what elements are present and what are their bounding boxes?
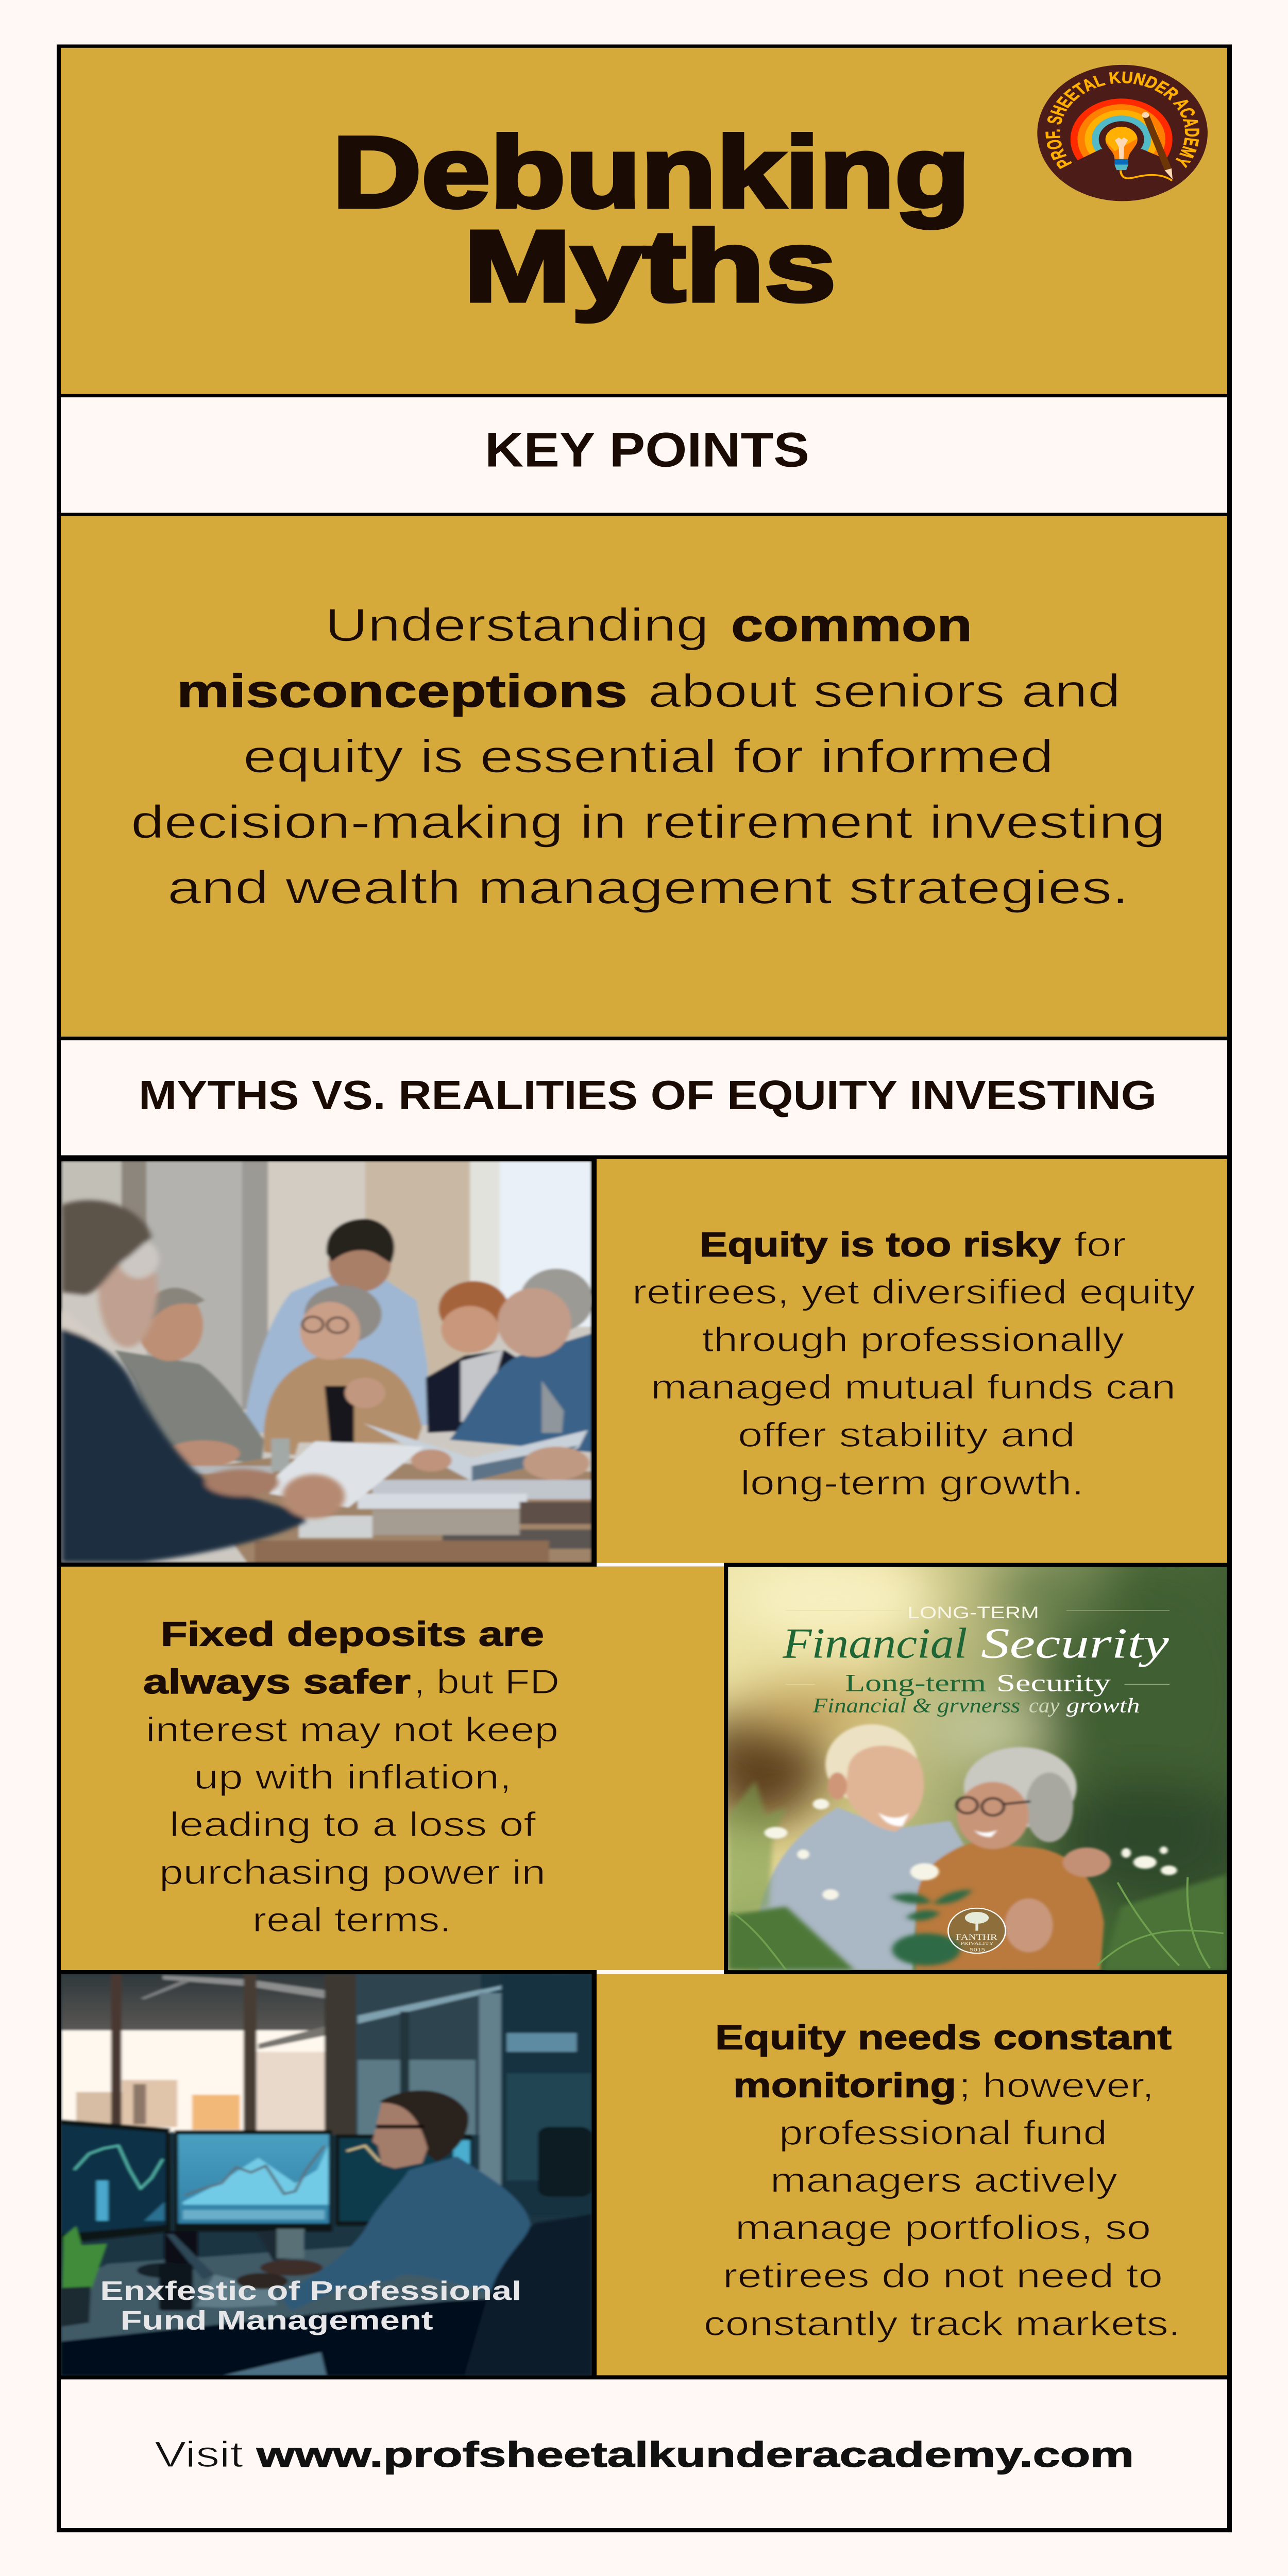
text in image: long-term financial security: cay [1029,1694,1060,1717]
text in image: caption: Enxfestic of Professional [100,2276,521,2306]
text block: introduction: equity is essential for informed [243,731,1054,783]
heading: myths vs realities: MYTHS VS. REALITIES OF EQUITY INVESTING [139,1072,1157,1118]
text block: fixed deposits: leading to a loss of [170,1805,536,1844]
gray henley man [115,1287,264,1467]
text block: equity is too risky [632,1225,1195,1502]
text block: introduction: and wealth management strategies. [167,862,1129,913]
text block: equity is too risky: for [1074,1225,1126,1264]
monitor stands, desk [61,2229,592,2376]
standing man [244,1219,428,1433]
text in image: long-term financial security: Security [981,1619,1170,1667]
panel: footer [61,2379,1227,2528]
left monitor [61,2120,171,2244]
text block: constant monitoring [704,2019,1180,2343]
text block: fixed deposits: interest may not keep [146,1710,558,1749]
panel: title [61,47,1227,394]
text block: fixed deposits: , but FD [414,1663,560,1701]
panel: myth 1 [597,1159,1227,1563]
seal emblem: 5015 [970,1947,985,1953]
text block: introduction: common [731,600,972,651]
text block: constant monitoring: managers actively [770,2161,1117,2199]
text block: constant monitoring: ; however, [959,2066,1154,2105]
text in image: long-term financial security: Long-term [845,1669,986,1697]
text block: introduction: misconceptions [177,666,628,717]
man at desk [236,2090,531,2311]
text block: constant monitoring: monitoring [733,2066,956,2105]
text block: introduction: decision-making in retirement investing [131,796,1165,848]
text: website call to action: www.profsheetalkunderacademy.com [256,2435,1134,2475]
text block: introduction: Understanding [325,600,709,651]
seal emblem: FANTHR [956,1933,997,1942]
plant and mug [61,2226,193,2327]
text block: fixed deposits: real terms. [252,1901,451,1939]
text block: constant monitoring: Equity needs constant [715,2019,1172,2057]
woman [916,1747,1111,1970]
foreground man [61,1200,345,1563]
photo: senior couple, long-term financial security [697,1550,1268,1971]
text block: fixed deposits [143,1615,560,1939]
right man in blue [450,1268,593,1452]
seal emblem [948,1908,1006,1953]
text in image: long-term financial security: Financial & grvnerss [812,1694,1020,1717]
chair [464,2127,592,2376]
panel: key points heading [61,397,1227,513]
text block: constant monitoring: professional fund [779,2113,1107,2152]
heading: key points: KEY POINTS [485,422,809,477]
office window and ceiling [61,1974,592,2215]
text block: constant monitoring: manage portfolios, so [735,2208,1151,2247]
divider stripe between rows [597,1970,724,1974]
text block: introduction: about seniors and [648,666,1121,717]
text block: equity is too risky: long-term growth. [740,1464,1084,1502]
man [755,1724,964,1970]
center woman [264,1285,422,1455]
text block: equity is too risky: offer stability and [738,1416,1075,1454]
text block: equity is too risky: retirees, yet diversified equity [632,1273,1195,1311]
seal emblem: PRIVALITY [960,1941,994,1946]
table [181,1458,592,1563]
text block: constant monitoring: retirees do not need to [723,2257,1163,2295]
text in image: long-term financial security: growth [1066,1694,1140,1717]
text block: fixed deposits: Fixed deposits are [161,1615,544,1653]
book and paper [363,1423,588,1481]
heading: Debunking Myths: Debunking [332,116,970,229]
icon: academy logo badge: PROF. SHEETAL KUNDER ACADEMY [1045,71,1199,169]
text block: introduction [131,600,1165,913]
heading: Debunking Myths: Myths [464,210,836,323]
panel: myths vs realities heading [61,1040,1227,1155]
photo: advisory meeting with seniors [61,1161,593,1563]
text block: equity is too risky: Equity is too risky [700,1225,1061,1264]
text block: fixed deposits: purchasing power in [159,1853,546,1892]
divider stripe between rows [597,1563,724,1567]
right monitor [335,2134,472,2226]
text block: equity is too risky: through professionally [702,1320,1124,1359]
text in image: long-term financial security [782,1603,1170,1717]
text block: fixed deposits: up with inflation, [194,1758,512,1797]
panel: introduction [61,516,1227,1037]
center monitor [175,2130,332,2231]
text block: fixed deposits: always safer [143,1663,411,1701]
text in image: long-term financial security: Financial [782,1619,967,1667]
heading: Debunking Myths [332,116,970,323]
woman at right [426,1281,531,1433]
panel: myth 3 [597,1974,1227,2375]
text block: constant monitoring: constantly track markets. [704,2304,1180,2343]
panel: myth 2 [61,1567,724,1970]
text block: equity is too risky: managed mutual funds can [651,1368,1176,1406]
text in image: caption [100,2276,521,2335]
text in image: long-term financial security: LONG-TERM [907,1603,1039,1622]
text: website call to action: Visit [155,2434,243,2475]
text in image: long-term financial security: Security [996,1669,1111,1697]
text in image: caption: Fund Management [121,2306,433,2335]
photo: fund manager at trading monitors [61,1974,592,2376]
plants and flowers [728,1781,1227,1970]
